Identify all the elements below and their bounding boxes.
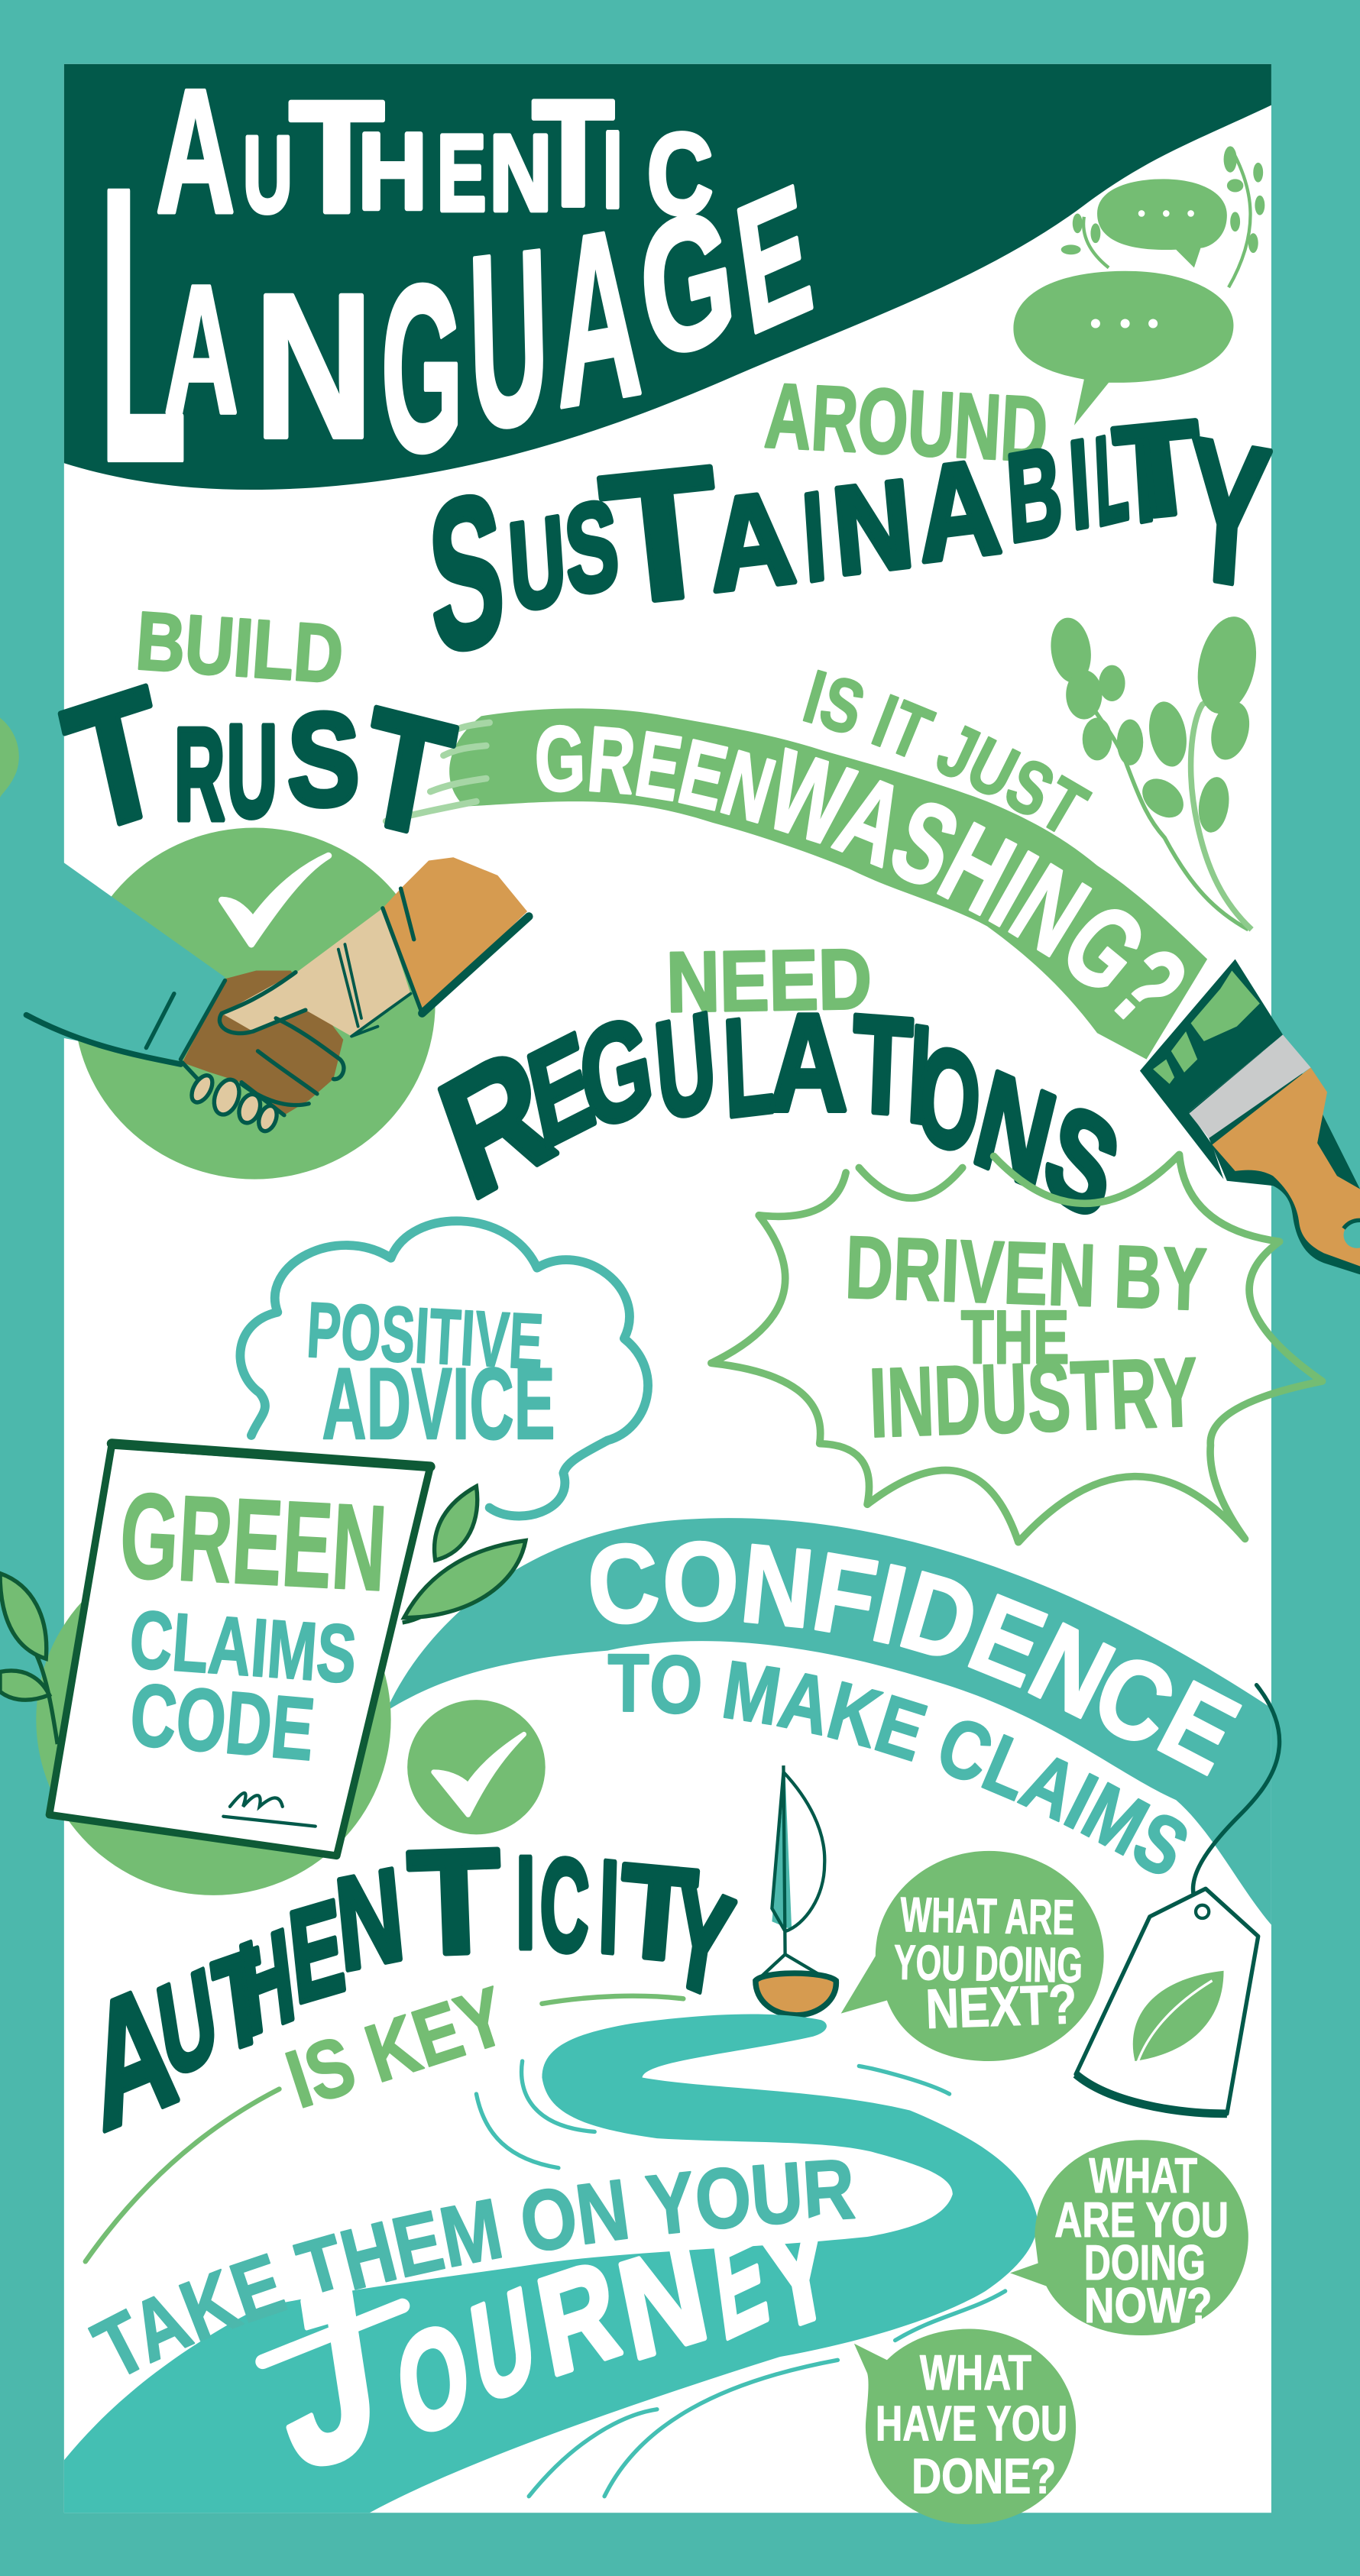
heading: regulations: E <box>504 1014 607 1178</box>
big speech bubble <box>1013 271 1233 426</box>
bubble: what have you done: WHAT <box>920 2345 1031 2400</box>
text: confidence: CONFIDENCE <box>590 1540 1242 1776</box>
tag string <box>1193 1685 1280 1914</box>
icon: leaves right of document <box>403 1487 526 1623</box>
heading: authenticity: H <box>222 1910 303 2064</box>
text: journey: U <box>451 2268 546 2433</box>
bristle highlights <box>1153 971 1260 1084</box>
heading: authenticity: U <box>137 1950 228 2106</box>
title line: Authentic: C <box>647 109 713 238</box>
heading: authenticity: T <box>406 1818 504 1986</box>
bubble: what are you doing now <box>1010 2140 1248 2335</box>
icon: handshake <box>26 828 529 1180</box>
text: build: BUILD <box>133 594 346 701</box>
heading: authenticity: Y <box>657 1849 755 2023</box>
bubble: what are you doing next: NEXT? <box>924 1973 1078 2040</box>
orange sleeve <box>383 857 527 1013</box>
title line: Language: A <box>164 248 238 451</box>
speech burst: driven by the industry: THE <box>961 1294 1069 1379</box>
heading: authenticity: T <box>614 1837 701 1989</box>
title line: Language: E <box>709 158 825 373</box>
heading: sustainability: T <box>594 428 730 644</box>
circle behind document <box>36 1544 391 1895</box>
text: is it just: IS IT JUST <box>802 669 1093 833</box>
small speech bubble <box>1097 179 1227 267</box>
is key lines <box>86 1996 683 2261</box>
title line: Language: G <box>620 176 746 399</box>
heading: trust: U <box>227 697 277 844</box>
cloud outline <box>240 1221 648 1516</box>
header banner <box>64 64 1271 490</box>
text: journey: J <box>248 2242 397 2522</box>
title line: Authentic: U <box>243 115 293 235</box>
burst outline <box>711 1154 1323 1542</box>
icon: speech bubbles and sprigs <box>1013 146 1264 426</box>
heading: regulations: I <box>904 997 939 1151</box>
heading: regulations: L <box>717 990 777 1147</box>
heading: authenticity: T <box>197 1927 276 2080</box>
title line: Language: A <box>539 183 648 458</box>
heading: sustainability: S <box>556 477 623 621</box>
teal brush stroke: confidence <box>386 1518 1271 1925</box>
text: journey: N <box>602 2218 719 2389</box>
fingers <box>187 1072 280 1134</box>
heading: authenticity: C <box>537 1830 594 1979</box>
text: is key <box>86 1969 683 2261</box>
heading: sustainability: A <box>701 464 801 620</box>
icon: leaves left of document <box>0 1574 57 1744</box>
heading: sustainability: U <box>500 493 571 638</box>
ferrule <box>1189 1034 1311 1138</box>
bristles <box>1140 959 1283 1180</box>
green circle <box>74 828 436 1180</box>
code text: CODE <box>127 1665 319 1779</box>
heading: sustainability: I <box>1125 408 1159 549</box>
title <box>99 53 825 543</box>
title line: Authentic: H <box>358 112 427 232</box>
title line: Authentic: N <box>490 113 552 234</box>
brown hand <box>183 971 343 1115</box>
heading: authenticity: A <box>60 1956 191 2169</box>
heading: sustainability: Y <box>1178 395 1283 626</box>
bubble: what are you doing next <box>841 1851 1104 2061</box>
right sprig <box>1224 146 1264 287</box>
heading: regulations: T <box>850 987 916 1143</box>
heading: authenticity: I <box>597 1833 623 1980</box>
thought cloud: positive advice <box>240 1221 648 1516</box>
title line: Authentic: E <box>437 113 486 234</box>
text: is key: IS KEY <box>276 1969 516 2125</box>
speech burst: driven by the industry: INDUSTRY <box>867 1337 1200 1458</box>
line work <box>26 888 529 1115</box>
heading: trust: T <box>44 653 184 872</box>
heading: authenticity: E <box>275 1878 352 2031</box>
text: journey: E <box>692 2206 778 2369</box>
text: journey: R <box>520 2236 631 2406</box>
thought cloud: positive advice: ADVICE <box>322 1347 555 1461</box>
heading: sustainability: T <box>1109 393 1209 547</box>
checkmark <box>222 856 329 944</box>
heading: trust: R <box>174 701 225 848</box>
text: journey: O <box>377 2300 481 2468</box>
heading: regulations: N <box>960 1042 1077 1211</box>
title line: Authentic: I <box>603 110 623 231</box>
bubble: what are you doing next: YOU DOING <box>893 1935 1083 1993</box>
beige hand <box>222 908 410 1037</box>
tag body <box>1076 1888 1258 2114</box>
text: around: AROUND <box>763 364 1050 481</box>
heading: regulations: G <box>562 994 663 1159</box>
handle <box>1213 1067 1360 1267</box>
bubble: what have you done: DONE? <box>912 2448 1056 2503</box>
handle outline <box>1189 1034 1360 1274</box>
signature <box>223 1793 316 1827</box>
document: green claims code <box>49 1444 430 1856</box>
bubble: what are you doing now: ARE YOU <box>1054 2193 1229 2248</box>
river <box>64 2014 1038 2513</box>
heading: sustainability: I <box>1060 414 1095 555</box>
river ripples <box>476 2061 1005 2497</box>
title line: Authentic: T <box>289 68 384 246</box>
title line: Authentic: T <box>533 69 614 238</box>
burst text: DRIVEN BY <box>844 1217 1208 1329</box>
heading: trust: T <box>348 672 469 870</box>
text: take them on your: TAKE THEM ON YOUR <box>87 2160 856 2374</box>
tag leaf <box>1133 1971 1224 2061</box>
heading: regulations: O <box>908 1015 996 1176</box>
title line: Language: U <box>460 202 553 481</box>
heading: sustainability: I <box>795 467 831 608</box>
claims text: CLAIMS <box>127 1593 359 1701</box>
icon: check circle <box>407 1700 546 1834</box>
text: to make claims: TO MAKE CLAIMS <box>608 1653 1187 1875</box>
left sprig <box>1061 213 1109 267</box>
bubble: what are you doing now: WHAT <box>1089 2148 1197 2203</box>
heading: regulations: R <box>406 1020 575 1236</box>
bubble: what have you done: HAVE YOU <box>876 2396 1067 2451</box>
paper <box>49 1445 430 1856</box>
heading: regulations: A <box>769 986 847 1140</box>
cloud text: POSITIVE <box>305 1286 546 1386</box>
journey heading <box>248 2194 847 2522</box>
title line: Language: N <box>254 251 373 481</box>
heading: sustainability: A <box>908 432 1006 591</box>
heading: authenticity: I <box>516 1830 536 1976</box>
text: need: NEED <box>665 931 873 1030</box>
bubble: what are you doing now: NOW? <box>1084 2278 1213 2333</box>
icon: sail boat <box>756 1765 836 2015</box>
title line: Language: G <box>381 236 463 500</box>
bubble: what have you done <box>854 2328 1076 2524</box>
bubble: what are you doing next: WHAT ARE <box>900 1887 1075 1945</box>
title line: Authentic: A <box>156 53 235 249</box>
heading: regulations: U <box>643 989 723 1150</box>
heading: trust: S <box>287 686 360 833</box>
heading: sustainability: N <box>826 454 919 601</box>
icon: leafy plant <box>1047 611 1264 930</box>
icon: paint brush <box>1140 959 1360 1274</box>
heading: authenticity: N <box>325 1844 410 1998</box>
heading: sustainability: S <box>413 455 512 699</box>
teal sleeve <box>63 862 225 1061</box>
heading: regulations: S <box>1026 1073 1148 1240</box>
heading: sustainability: B <box>999 424 1067 568</box>
green brush stroke <box>386 708 1207 1060</box>
speech burst: driven by the industry <box>711 1154 1323 1542</box>
bubble: what are you doing now: DOING <box>1084 2235 1206 2290</box>
icon: leaf fragment at left edge <box>0 717 19 798</box>
text: journey: Y <box>745 2194 847 2361</box>
heading: sustainability: L <box>1086 409 1132 552</box>
title line: Language: L <box>99 107 187 543</box>
text: greenwashing: GREENWASHING? <box>536 724 1184 1019</box>
icon: hang tag <box>1076 1685 1280 2114</box>
green text: GREEN <box>117 1467 390 1616</box>
